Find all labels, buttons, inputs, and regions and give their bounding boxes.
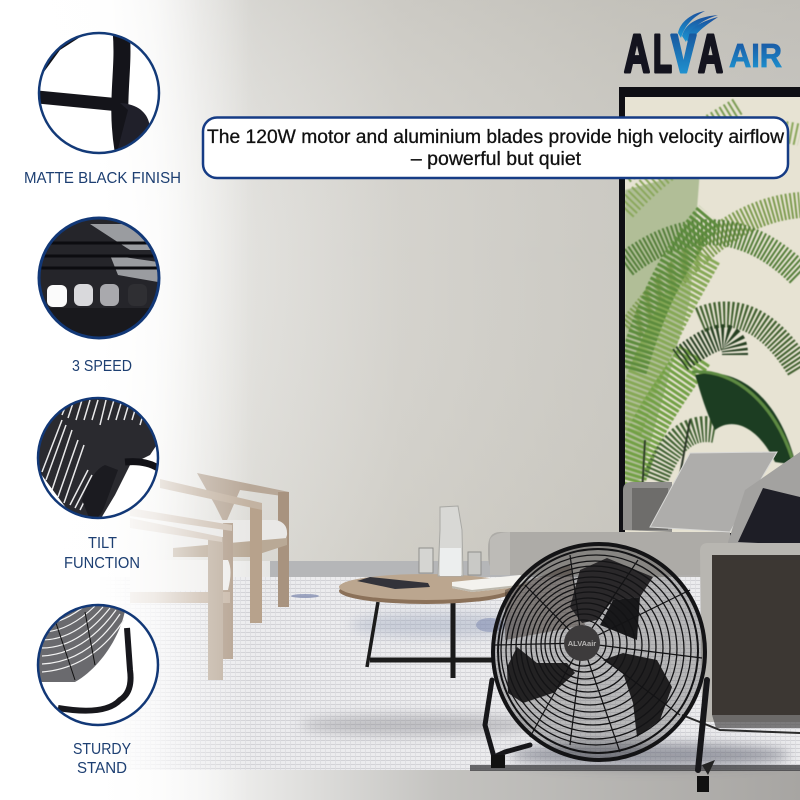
feature: matte black finish <box>24 30 181 187</box>
label: 3 SPEED <box>72 358 132 375</box>
fan blades <box>494 545 704 759</box>
cushion: large side <box>728 452 800 560</box>
icon: speed buttons <box>38 216 160 340</box>
label: STURDY <box>73 741 131 758</box>
feature: sturdy stand: STAND <box>77 760 127 777</box>
logo ALVA: A <box>624 24 650 84</box>
back chair <box>160 473 289 623</box>
rug <box>100 577 800 771</box>
callout: The 120W motor and aluminium blades provide high velocity airflow <box>207 126 785 148</box>
sofa <box>488 452 800 733</box>
label: MATTE BLACK FINISH <box>24 170 181 187</box>
tray and book <box>357 575 527 592</box>
fan hub with logo <box>564 625 600 661</box>
front chair <box>130 508 233 680</box>
cushion: dark <box>738 488 800 545</box>
logo ALVA: V <box>671 24 696 84</box>
carafe and glasses <box>419 506 481 576</box>
logo swoosh <box>678 11 718 44</box>
callout <box>203 118 788 178</box>
coffee table <box>339 574 513 678</box>
cushion: grey <box>650 452 777 532</box>
fan hub with logo: ALVAair <box>568 639 596 648</box>
logo <box>624 11 782 84</box>
feature: 3 speed <box>38 216 160 375</box>
feature: sturdy stand <box>38 605 158 777</box>
fan grill <box>493 544 705 760</box>
logo ALVA: L <box>653 24 672 84</box>
icon: stand <box>39 606 156 714</box>
icon: tilt joint <box>38 398 160 520</box>
callout: – powerful but quiet <box>411 148 582 170</box>
ottoman <box>700 543 800 722</box>
window with palm plant <box>619 87 800 537</box>
left white fade <box>0 0 250 800</box>
label: TILT <box>88 535 117 552</box>
fan stand: rear and legs <box>485 680 707 770</box>
fan <box>485 544 715 792</box>
icon: tube detail <box>40 36 150 150</box>
feature: tilt function <box>38 398 160 572</box>
logo ALVA <box>624 24 723 84</box>
logo ALVA: A <box>698 24 723 84</box>
feature: tilt function: FUNCTION <box>64 555 140 572</box>
logo AIR: AIR <box>729 37 782 74</box>
floor <box>0 561 800 800</box>
